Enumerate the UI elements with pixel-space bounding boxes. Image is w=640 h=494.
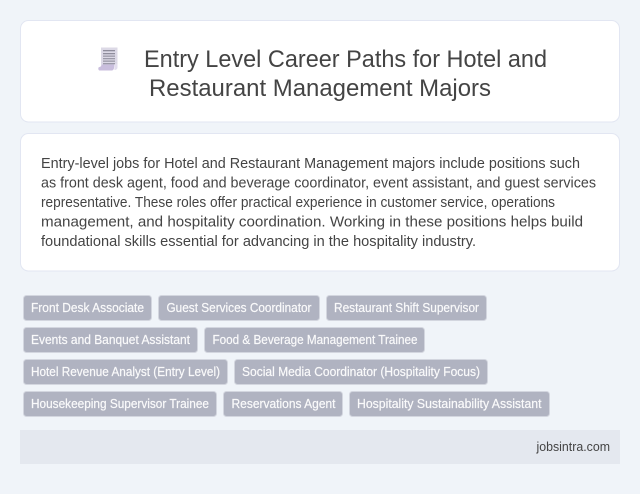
text block: description <box>41 156 596 250</box>
tag: Housekeeping Supervisor Trainee: Housekeeping Supervisor Trainee <box>31 397 209 411</box>
icon: receipt document <box>98 48 118 70</box>
text block: description: as front desk agent, food and beverage coordinator, event assistant, and guest services <box>41 176 596 192</box>
footer text: jobsintra.com: jobsintra.com <box>536 440 610 454</box>
title: Entry Level Career Paths for Hotel and <box>144 46 547 73</box>
tag: Events and Banquet Assistant: Events and Banquet Assistant <box>31 333 190 347</box>
tag: Guest Services Coordinator <box>158 296 320 320</box>
text block: description: foundational skills essential for advancing in the hospitality industry. <box>41 234 476 250</box>
tag: Front Desk Associate <box>24 296 152 320</box>
tag: Restaurant Shift Supervisor <box>326 296 486 320</box>
tag: Social Media Coordinator (Hospitality Focus): Social Media Coordinator (Hospitality Focus) <box>242 365 480 379</box>
tag: Hospitality Sustainability Assistant <box>350 392 550 416</box>
tag: Hotel Revenue Analyst (Entry Level): Hotel Revenue Analyst (Entry Level) <box>31 365 220 379</box>
tag: Food & Beverage Management Trainee <box>204 328 424 352</box>
tag: Housekeeping Supervisor Trainee <box>24 392 216 416</box>
tag: Events and Banquet Assistant <box>24 328 198 352</box>
panel: career tags <box>24 296 550 416</box>
panel: title card <box>20 20 620 122</box>
text block: description: management, and hospitality coordination. Working in these positions helps build <box>41 214 583 230</box>
title: Restaurant Management Majors <box>149 75 491 102</box>
tag: Front Desk Associate: Front Desk Associate <box>31 301 144 315</box>
text block: description: representative. These roles offer practical experience in customer service, operations <box>41 195 555 211</box>
tag: Hotel Revenue Analyst (Entry Level) <box>24 360 228 384</box>
title <box>144 46 547 102</box>
tag: Restaurant Shift Supervisor: Restaurant Shift Supervisor <box>334 301 479 315</box>
tag: Food & Beverage Management Trainee: Food & Beverage Management Trainee <box>212 333 418 347</box>
tag: Guest Services Coordinator: Guest Services Coordinator <box>166 301 312 315</box>
tag: Hospitality Sustainability Assistant: Hospitality Sustainability Assistant <box>357 397 542 411</box>
tag: Social Media Coordinator (Hospitality Focus) <box>234 360 488 384</box>
panel: description <box>20 134 620 271</box>
tag: Reservations Agent <box>224 392 342 416</box>
text block: description: Entry-level jobs for Hotel and Restaurant Management majors include positions such <box>41 156 580 172</box>
footer bar <box>20 430 620 464</box>
tag: Reservations Agent: Reservations Agent <box>232 397 336 411</box>
